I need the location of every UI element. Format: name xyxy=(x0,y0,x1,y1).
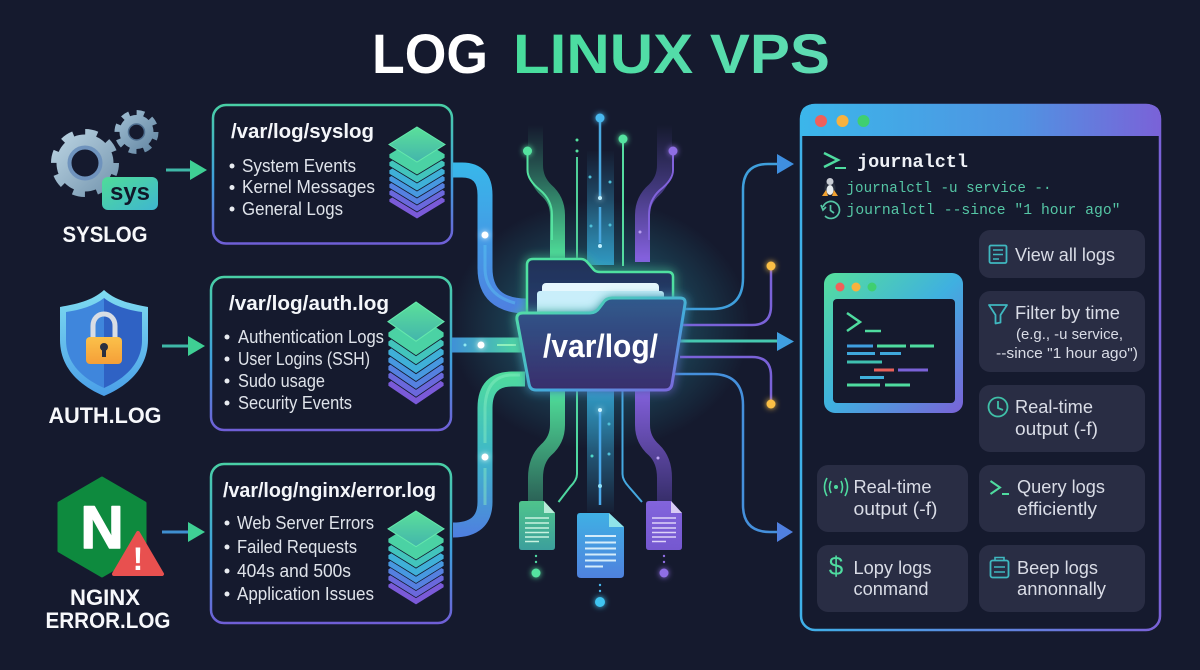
card: beep logs: Beep logs xyxy=(1017,558,1098,578)
panel: syslog: Kernel Messages xyxy=(242,177,375,197)
card: view all logs: View all logs xyxy=(1015,245,1115,265)
label: nginx error.log xyxy=(46,585,170,633)
panel: nginx error.log: Application Issues xyxy=(237,584,374,604)
panel: auth.log: Security Events xyxy=(238,393,352,413)
label: nginx error.log: NGINX xyxy=(70,585,140,610)
icon: nginx hexagon with warning: ! xyxy=(133,541,143,577)
card: beep logs: annonnally xyxy=(1017,579,1106,599)
command: service: journalctl -u service -· xyxy=(846,180,1052,197)
panel: nginx error.log: /var/log/nginx/error.log xyxy=(223,480,436,502)
icon: nginx hexagon with warning xyxy=(59,478,162,577)
card: real-time output right: output (-f) xyxy=(1015,419,1098,439)
card: filter by time: --since "1 hour ago") xyxy=(996,345,1138,362)
card: query logs: Query logs xyxy=(1017,477,1105,497)
card: filter by time: Filter by time xyxy=(1015,303,1120,323)
card: filter by time xyxy=(979,291,1145,372)
arrow: auth to box xyxy=(162,336,205,356)
icon: nginx hexagon with warning: N xyxy=(80,494,124,561)
panel: nginx error.log: Failed Requests xyxy=(237,537,357,557)
title xyxy=(372,22,830,85)
central folder: /var/log/ xyxy=(543,328,658,364)
terminal title bar xyxy=(800,104,1161,136)
connectors: upper streams xyxy=(523,114,678,266)
icon: auth shield with padlock xyxy=(60,290,148,396)
folder glow xyxy=(450,200,750,450)
card: real-time output left xyxy=(817,465,968,532)
central folder xyxy=(517,259,685,390)
icon: blue document xyxy=(577,513,624,607)
card: copy logs xyxy=(817,545,968,612)
card: query logs xyxy=(979,465,1145,532)
label: syslog: SYSLOG xyxy=(62,222,148,247)
icon: green document xyxy=(519,501,555,578)
label: auth.log: AUTH.LOG xyxy=(48,403,162,428)
icon: syslog gears: sys xyxy=(110,179,150,206)
command: since: journalctl --since "1 hour ago" xyxy=(846,202,1120,219)
panel: auth.log xyxy=(211,277,451,430)
panel: syslog: /var/log/syslog xyxy=(231,121,374,143)
icon: syslog gears xyxy=(54,113,158,210)
card: copy logs: $ xyxy=(829,551,844,581)
card: filter by time: (e.g., -u service, xyxy=(1016,326,1123,343)
panel: terminal journalctl xyxy=(800,104,1161,630)
card: beep logs xyxy=(979,545,1145,612)
icon: purple document xyxy=(646,501,682,578)
panel: nginx error.log: Web Server Errors xyxy=(237,513,374,533)
card: real-time output left: Real-time xyxy=(854,477,932,497)
card: real-time output right xyxy=(979,385,1145,452)
arrow: syslog to box xyxy=(166,160,207,180)
panel: auth.log: Authentication Logs xyxy=(238,327,384,347)
heading: journalctl: journalctl xyxy=(857,152,968,173)
card: copy logs: conmand xyxy=(854,579,928,599)
panel: nginx error.log xyxy=(211,464,451,623)
card: real-time output right: Real-time xyxy=(1015,397,1093,417)
panel: syslog xyxy=(213,105,452,244)
arrow: nginx to box xyxy=(162,522,205,542)
connectors: right lines and arrows xyxy=(675,154,794,542)
card: view all logs xyxy=(979,230,1145,278)
panel: syslog: System Events xyxy=(242,156,356,176)
panel: syslog: General Logs xyxy=(242,199,343,219)
label: nginx error.log: ERROR.LOG xyxy=(46,608,170,633)
connectors: left pipes into folder xyxy=(452,170,527,530)
card: query logs: efficiently xyxy=(1017,499,1097,519)
illustration: mini terminal xyxy=(824,273,963,413)
title: LOG xyxy=(372,22,488,85)
connectors: lower streams xyxy=(536,385,664,512)
title: LINUX VPS xyxy=(513,22,830,85)
panel: auth.log: Sudo usage xyxy=(238,371,325,391)
card: real-time output left: output (-f) xyxy=(854,499,938,519)
panel: auth.log: User Logins (SSH) xyxy=(238,349,370,369)
card: copy logs: Lopy logs xyxy=(854,558,932,578)
panel: auth.log: /var/log/auth.log xyxy=(229,293,389,315)
panel: nginx error.log: 404s and 500s xyxy=(237,561,351,581)
